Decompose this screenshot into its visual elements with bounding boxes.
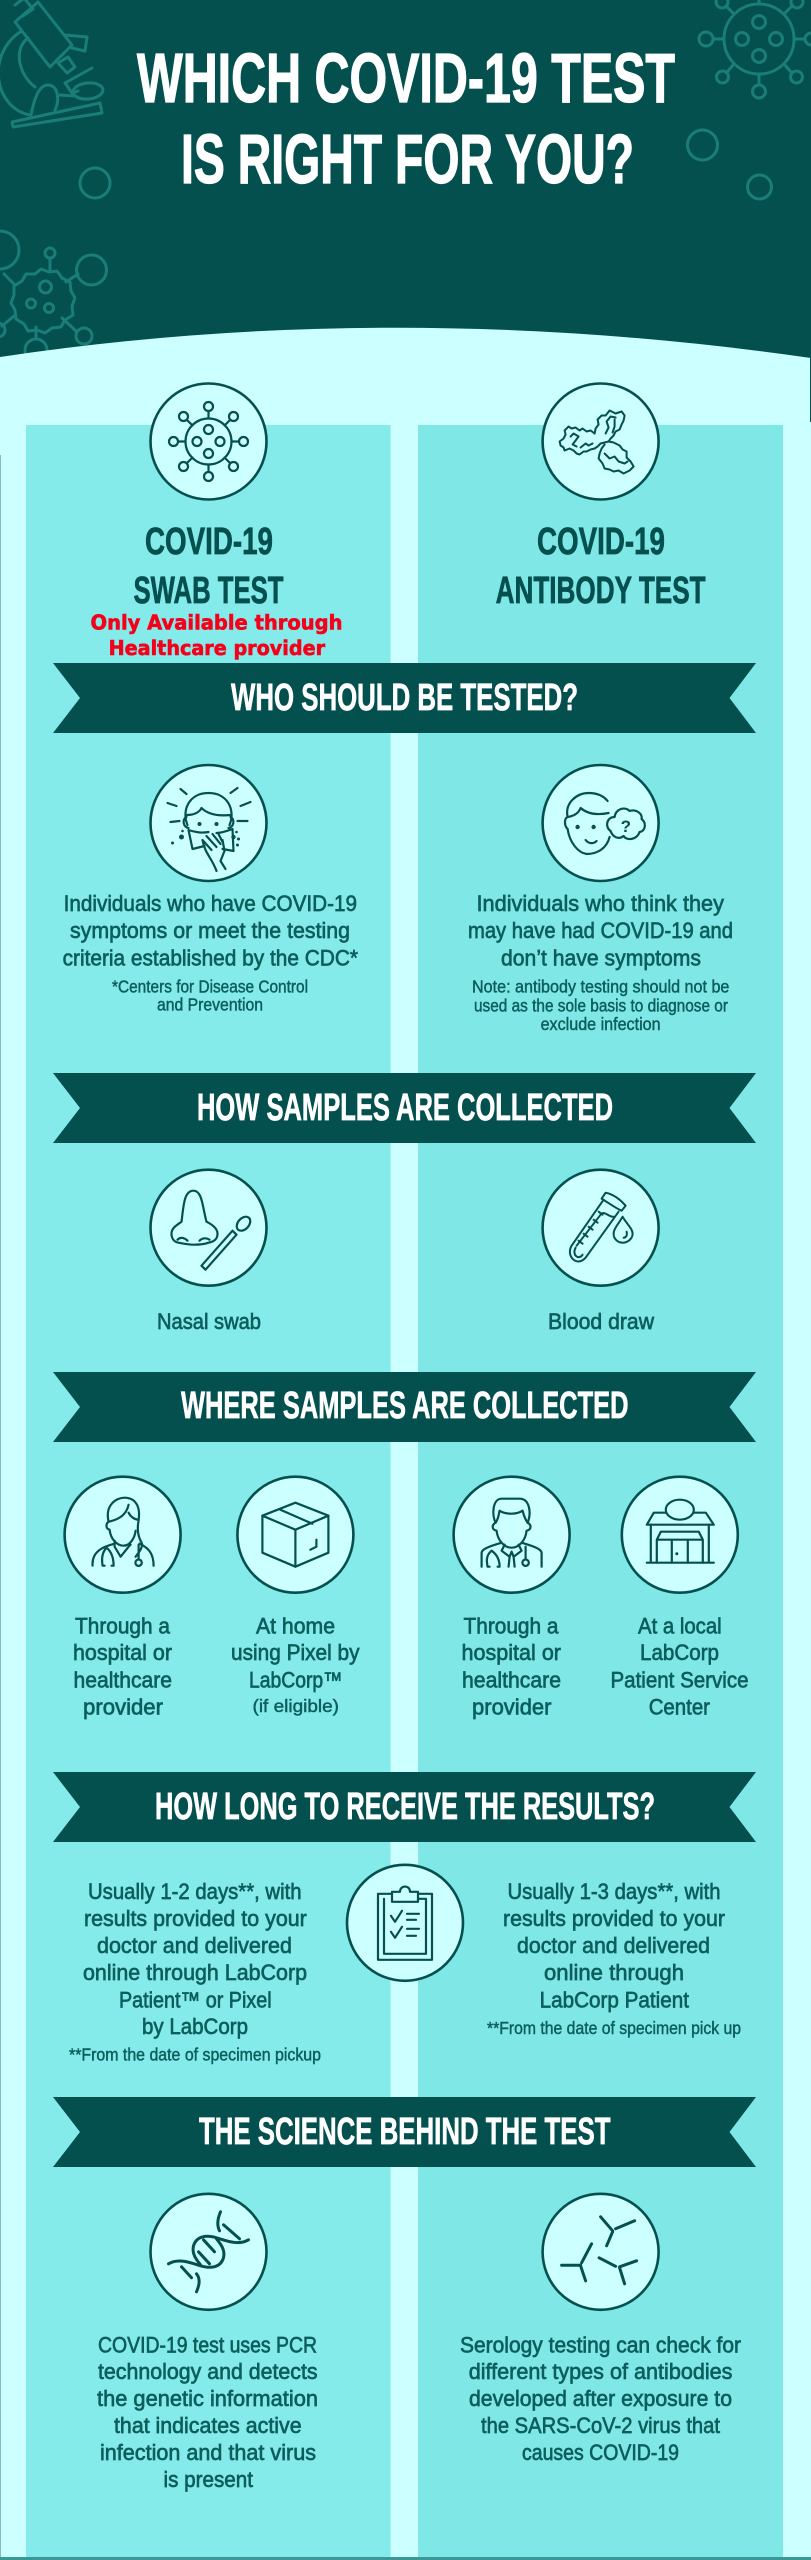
banner: where samples are collected xyxy=(53,1372,756,1442)
text: local labcorp center xyxy=(610,1614,748,1720)
text: antibody science: different types of antibodies xyxy=(469,2359,732,2384)
text: swab results timing: Usually 1-2 days**, with xyxy=(88,1879,302,1904)
text: swab science: is present xyxy=(164,2467,253,2492)
callout: availability note: Only Available through xyxy=(90,610,342,634)
text: local labcorp center: At a local xyxy=(638,1614,722,1638)
text: antibody science: causes COVID-19 xyxy=(522,2440,679,2465)
text: swab results timing: Patient™ or Pixel xyxy=(119,1988,272,2012)
text: local labcorp center: Center xyxy=(649,1694,710,1720)
text: antibody results timing: doctor and delivered xyxy=(517,1933,710,1958)
text: antibody results timing: LabCorp Patient xyxy=(540,1988,689,2012)
text: swab results timing: results provided to your xyxy=(84,1906,307,1931)
callout: availability note xyxy=(90,610,342,660)
icon: virus background top right xyxy=(699,0,811,98)
text: through a hospital, swab: hospital or xyxy=(73,1640,172,1665)
text: who should be tested, antibody: Note: antibody testing should not be xyxy=(472,976,729,996)
heading: swab test: SWAB TEST xyxy=(134,570,284,612)
text: antibody results timing: results provided to your xyxy=(503,1906,725,1931)
text: swab results timing: online through LabCorp xyxy=(83,1960,307,1985)
text: through a hospital, antibody: Through a xyxy=(464,1614,559,1638)
heading: antibody test: COVID-19 xyxy=(537,521,665,563)
icon: person wondering xyxy=(543,765,659,881)
icon: microscope background xyxy=(0,0,104,127)
text: at home using pixel: (if eligible) xyxy=(252,1696,339,1716)
text: who should be tested, antibody: don’t have symptoms xyxy=(501,946,701,970)
text: at home using pixel: using Pixel by xyxy=(231,1640,360,1665)
icon: male doctor xyxy=(454,1477,570,1593)
icon: antibody in circle xyxy=(543,384,659,500)
heading: antibody test xyxy=(496,521,706,612)
text: antibody results timing: **From the date of specimen pick up xyxy=(487,2018,741,2038)
icon: blood test tube xyxy=(543,1170,659,1286)
banner: how samples are collected xyxy=(53,1073,756,1143)
icon: virus background left xyxy=(0,231,106,361)
icon: female doctor xyxy=(65,1477,181,1593)
text: through a hospital, antibody xyxy=(462,1614,561,1720)
text: antibody science: the SARS-CoV-2 virus that xyxy=(481,2413,720,2438)
text: through a hospital, swab: provider xyxy=(83,1694,163,1720)
callout: availability note: Healthcare provider xyxy=(109,636,325,660)
banner: who should be tested xyxy=(53,663,756,733)
text: antibody results timing: online through xyxy=(544,1960,684,1985)
icon: floating circles background xyxy=(80,130,772,199)
text: through a hospital, swab: healthcare xyxy=(74,1668,172,1692)
text: antibody results timing xyxy=(487,1879,741,2038)
text: who should be tested, antibody: exclude infection xyxy=(541,1014,661,1034)
panel: antibody test column xyxy=(418,425,783,2557)
banner: who should be tested: WHO SHOULD BE TESTED? xyxy=(231,677,578,719)
text: at home using pixel: At home xyxy=(256,1614,335,1638)
text: who should be tested, swab: symptoms or meet the testing xyxy=(70,918,350,943)
text: who should be tested, swab: criteria established by the CDC* xyxy=(63,946,358,970)
panel: swab test column xyxy=(26,425,390,2557)
heading: antibody test: ANTIBODY TEST xyxy=(496,570,706,612)
text: through a hospital, swab: Through a xyxy=(75,1614,171,1638)
banner: the science behind the test: THE SCIENCE BEHIND THE TEST xyxy=(199,2111,610,2153)
text: through a hospital, antibody: provider xyxy=(472,1694,552,1720)
text: swab results timing xyxy=(69,1879,321,2064)
icon: patient service center storefront xyxy=(622,1477,738,1593)
text: swab science: the genetic information xyxy=(97,2386,318,2411)
text: swab results timing: by LabCorp xyxy=(142,2014,248,2039)
icon: clipboard checklist xyxy=(347,1865,463,1981)
text: through a hospital, antibody: hospital or xyxy=(462,1640,561,1665)
icon: antibodies xyxy=(543,2194,659,2310)
text: who should be tested, antibody: used as the sole basis to diagnose or xyxy=(474,996,728,1016)
text: swab results timing: doctor and delivered xyxy=(97,1933,292,1958)
icon: package box xyxy=(237,1477,353,1593)
icon: person sneezing into tissue xyxy=(150,765,266,881)
text: local labcorp center: Patient Service xyxy=(610,1668,748,1692)
text: swab science: infection and that virus xyxy=(100,2440,316,2465)
text: who should be tested, swab: *Centers for Disease Control xyxy=(112,976,308,996)
label: nasal swab: Nasal swab xyxy=(157,1309,261,1334)
header band xyxy=(0,0,811,430)
text: through a hospital, swab xyxy=(73,1614,172,1720)
icon: dna helix xyxy=(150,2194,266,2310)
icon: person wondering: ? xyxy=(621,817,631,836)
heading: swab test: COVID-19 xyxy=(145,521,273,563)
text: who should be tested, antibody: Individuals who think they xyxy=(476,891,724,916)
text: antibody science xyxy=(460,2332,741,2465)
banner: the science behind the test xyxy=(53,2097,756,2167)
text: swab science xyxy=(97,2332,318,2492)
text: at home using pixel: LabCorp™ xyxy=(249,1668,342,1692)
text: who should be tested, antibody: may have had COVID-19 and xyxy=(468,918,733,943)
text: who should be tested, swab: and Prevention xyxy=(157,994,263,1014)
text: at home using pixel xyxy=(231,1614,360,1716)
text: antibody science: Serology testing can check for xyxy=(460,2332,741,2358)
text: through a hospital, antibody: healthcare xyxy=(462,1668,561,1692)
text: swab science: that indicates active xyxy=(114,2413,302,2438)
text: swab science: technology and detects xyxy=(98,2359,318,2384)
icon: virus in circle xyxy=(150,384,266,500)
text: antibody science: developed after exposure to xyxy=(469,2386,732,2411)
icon: nose and swab xyxy=(150,1170,266,1286)
text: who should be tested, swab xyxy=(63,891,358,1014)
heading: swab test xyxy=(134,521,284,612)
text: swab science: COVID-19 test uses PCR xyxy=(98,2332,317,2358)
banner: how samples are collected: HOW SAMPLES ARE COLLECTED xyxy=(197,1087,613,1129)
text: local labcorp center: LabCorp xyxy=(640,1640,719,1665)
text: who should be tested, swab: Individuals who have COVID-19 xyxy=(64,891,357,916)
label: blood draw: Blood draw xyxy=(548,1309,654,1334)
title xyxy=(137,39,675,198)
text: antibody results timing: Usually 1-3 days**, with xyxy=(508,1879,721,1904)
banner: how long to receive the results xyxy=(53,1772,756,1842)
text: who should be tested, antibody xyxy=(468,891,733,1034)
text: swab results timing: **From the date of specimen pickup xyxy=(69,2044,321,2064)
